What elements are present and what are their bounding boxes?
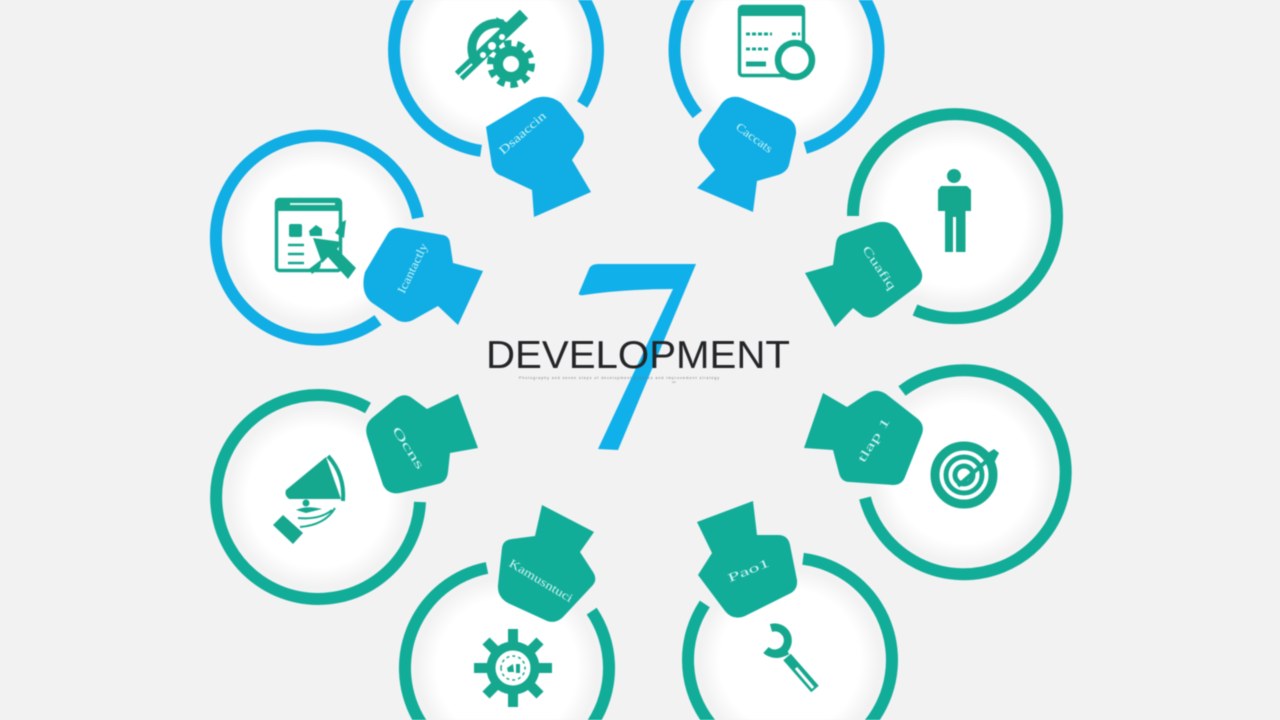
icon: browser window with ring (739, 6, 812, 77)
icon: gear (474, 629, 552, 707)
ring (399, 562, 615, 720)
panel: bottom-left step (399, 505, 615, 720)
ring (682, 553, 898, 720)
callout bubble (805, 222, 922, 327)
bubble label: tlap 1 (854, 415, 893, 465)
ring (388, 0, 604, 157)
ring (865, 370, 1066, 574)
panel: right upper step (805, 114, 1057, 327)
ring (853, 114, 1057, 318)
callout bubble (363, 228, 483, 325)
callout bubble (366, 394, 478, 493)
subtitle: Photography and seven steps of development process and improvement strategy (519, 376, 719, 380)
callout bubble (697, 501, 797, 618)
panel: left lower step (216, 394, 478, 599)
callout bubble (486, 97, 591, 217)
subtitle (519, 376, 719, 384)
icon: megaphone and hand (273, 456, 343, 544)
panel: right lower step (804, 370, 1066, 574)
callout bubble (498, 505, 595, 622)
icon: browser window with cursor (276, 199, 356, 279)
ring (669, 0, 885, 154)
bubble label: Pao1 (725, 556, 772, 585)
bubble label: Icantactly (394, 241, 431, 296)
icon: wrench (766, 627, 815, 689)
title: DEVELOPMENT (486, 334, 790, 377)
panel: left upper step (216, 136, 483, 340)
panel: top-right step (669, 0, 885, 212)
icon: person (938, 169, 971, 252)
bubble label: Cuafiq (860, 243, 899, 292)
big numeral seven (579, 264, 696, 450)
bubble label: Kamusntuci (507, 556, 576, 606)
icon: gear and wrench (459, 14, 531, 84)
panel: top-left step (388, 0, 604, 217)
bubble label: Ocns (389, 424, 428, 472)
icon: target and dart (935, 446, 999, 504)
callout bubble (697, 97, 796, 212)
bubble label: Dsaaccin (496, 109, 549, 157)
subtitle: ref (672, 380, 676, 384)
panel: bottom-right step (682, 501, 898, 720)
callout bubble (804, 391, 923, 485)
ring (216, 136, 418, 340)
bubble label: Caccats (733, 120, 776, 156)
ring (216, 395, 420, 599)
